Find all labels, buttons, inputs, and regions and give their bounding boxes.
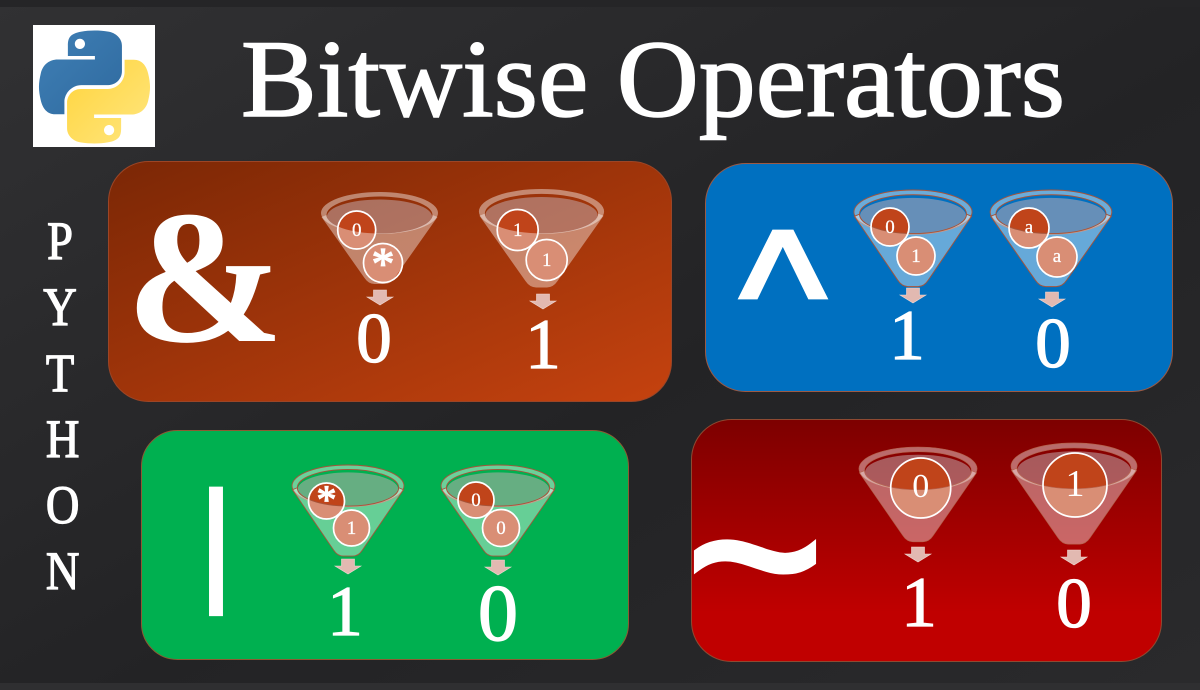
funnel: 1 and 1 gives 1: [479, 189, 604, 384]
funnel: * or 1 gives 1: *: [316, 477, 336, 522]
funnel: not 1 gives 0: 0: [1056, 565, 1092, 643]
symbol: ampersand: &: [126, 173, 284, 383]
funnel: not 1 gives 0: 1: [1066, 463, 1084, 505]
vertical label: PYTHON: O: [46, 475, 79, 535]
funnel: 0 or 0 gives 0: 0: [478, 570, 518, 658]
funnel: * or 1 gives 1: 1: [327, 573, 363, 651]
panel: NOT operator: [686, 420, 1162, 685]
funnel: * or 1 gives 1: [292, 465, 404, 651]
funnel: 0 and * gives 0: *: [372, 238, 394, 289]
python logo: [33, 25, 155, 147]
funnel: 0 xor 1 gives 1: [854, 190, 972, 375]
funnel: 0 xor 1 gives 1: 1: [911, 246, 921, 267]
funnel: a xor a gives 0: a: [1025, 217, 1034, 238]
panel: AND operator: [108, 162, 672, 402]
funnel: 0 or 0 gives 0: 0: [496, 518, 506, 539]
symbol: caret: ^: [741, 194, 825, 395]
funnel: 0 or 0 gives 0: 0: [471, 490, 481, 511]
funnel: not 0 gives 1: 1: [901, 564, 937, 642]
funnel: 0 and * gives 0: 0: [356, 300, 392, 378]
funnel: 0 and * gives 0: 0: [352, 220, 361, 241]
funnel: 1 and 1 gives 1: 1: [513, 220, 522, 241]
symbol: pipe: |: [198, 464, 234, 615]
vertical label: PYTHON: H: [46, 409, 79, 469]
funnel: 0 xor 1 gives 1: 0: [885, 217, 895, 238]
vertical label: PYTHON: N: [46, 541, 79, 601]
funnel: 1 and 1 gives 1: 1: [525, 306, 561, 384]
panel: XOR operator: [706, 164, 1172, 395]
vertical label: PYTHON: Y: [43, 277, 77, 337]
funnel: a xor a gives 0: 0: [1035, 305, 1071, 383]
funnel: * or 1 gives 1: 1: [347, 518, 356, 539]
funnel: not 0 gives 1: 0: [912, 468, 929, 505]
vertical label: PYTHON: T: [46, 343, 74, 403]
funnel: 0 and * gives 0: [321, 192, 438, 378]
funnel: a xor a gives 0: a: [1053, 246, 1062, 267]
funnel: not 0 gives 1: [859, 447, 977, 642]
funnel: 0 or 0 gives 0: [441, 465, 555, 658]
funnel: not 1 gives 0: [1011, 443, 1137, 643]
funnel: a xor a gives 0: [990, 190, 1112, 383]
vertical label: PYTHON: P: [47, 211, 73, 271]
title: Bitwise Operators: [241, 18, 1065, 140]
funnel: 0 xor 1 gives 1: 1: [889, 297, 925, 375]
vertical label: PYTHON: [43, 211, 79, 601]
panel: OR operator: [142, 430, 628, 660]
funnel: 1 and 1 gives 1: 1: [542, 250, 551, 271]
symbol: tilde: ~: [686, 422, 824, 685]
